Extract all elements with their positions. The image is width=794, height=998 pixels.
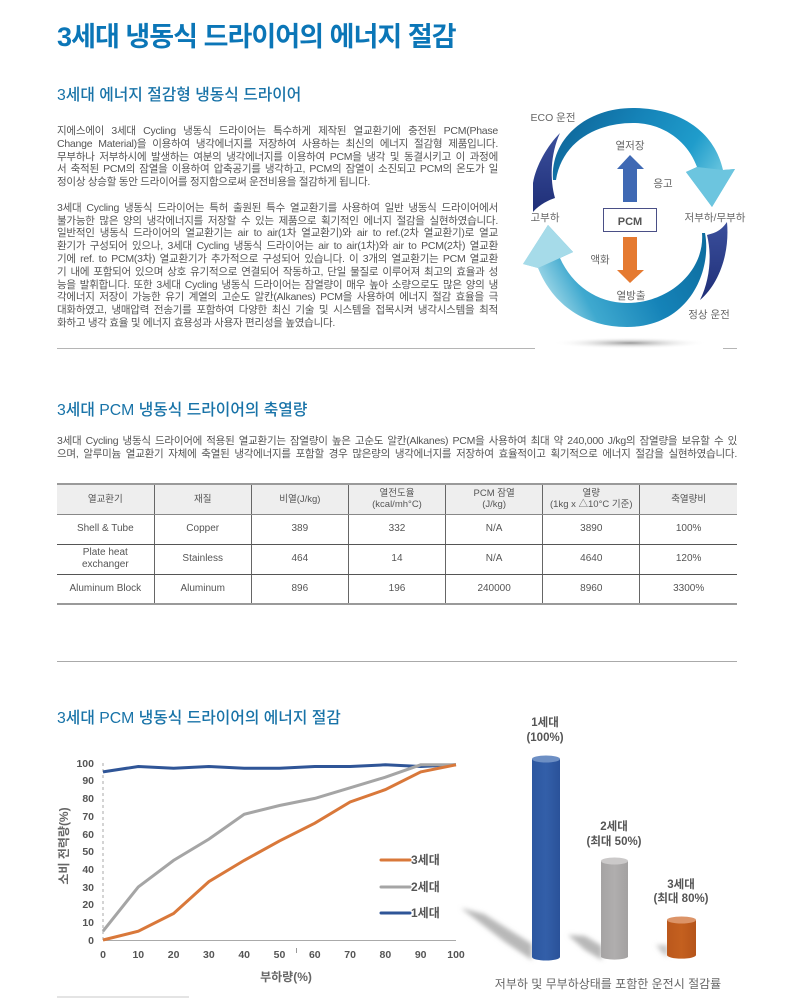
heading: PCM dryer heat storage: 3세대 PCM 냉동식 드라이어의 축열량 <box>57 402 307 419</box>
y axis ticks and labels: 60 <box>82 829 94 841</box>
table: heat exchanger comparison: 8960 <box>580 583 602 594</box>
table: heat exchanger comparison: (kcal/mh°C) <box>372 499 422 510</box>
legend: 3세대 <box>411 853 440 867</box>
text block: dryer description: 정이상 상승할 동안 드라이어를 정지함으로써 운전비용을 절감하게 됩니다. <box>57 176 370 188</box>
text block: dryer description: 서 축적된 PCM의 잠열을 이용하여 압축공기를 냉각하고, PCM의 잠열이 소진되고 PCM의 온도가 일 <box>57 163 498 175</box>
table: heat exchanger comparison: Stainless <box>182 553 223 564</box>
cylinder chart: generation comparison <box>461 715 721 991</box>
text block: dryer description <box>57 125 498 329</box>
table: heat exchanger comparison: PCM 잠열 <box>474 488 515 499</box>
x axis labels: 80 <box>380 949 391 961</box>
text block: dryer description: 불가능한 많은 양의 냉각에너지를 저장할 수 있는 제품으로 획기적인 에너지 절감을 실현하였습니다. <box>57 215 498 227</box>
table: heat exchanger comparison: 축열량비 <box>671 494 706 504</box>
title: 3세대 냉동식 드라이어의 에너지 절감 <box>57 22 456 52</box>
table: heat exchanger comparison: 100% <box>676 523 701 534</box>
text block: dryer description: 대화하였고, 냉매압력 전송기를 포함하여 다양한 최신 기술 및 시스템을 접목시켜 냉각시스템을 최적 <box>57 304 498 316</box>
text block: dryer description: 기에 ref. to PCM(3차) 열교환기가 추가적으로 구성되어 있습니다. 이 3개의 열교환기는 PCM 열교환 <box>57 253 498 265</box>
heading: energy-saving dryer: 3세대 에너지 절감형 냉동식 드라이어 <box>57 87 301 104</box>
cylinder: 2nd generation <box>601 858 628 960</box>
table: heat exchanger comparison: 3300% <box>673 583 704 594</box>
box: PCM: PCM <box>618 216 642 228</box>
text block: PCM description: 3세대 Cycling 냉동식 드라이어에 적용된 열교환기는 잠열량이 높은 고순도 알칸(Alkanes) PCM을 사용하여 최대 약 240,000 J/kg의 잠열량을 보유할 수 있 <box>57 435 737 447</box>
table: heat exchanger comparison: 3890 <box>580 523 602 534</box>
cylinder shadows <box>461 908 668 960</box>
table: heat exchanger comparison: 332 <box>389 523 405 534</box>
text block: PCM description <box>57 435 737 460</box>
text block: dryer description: 각에너지 저장이 가능한 유기 계열의 고순도 알칸(Alkanes) PCM을 사용하여 에너지 절감 효율을 극 <box>57 291 498 303</box>
text block: dryer description: 3세대 Cycling 냉동식 드라이어는 특허 출원된 특수 열교환기를 사용하여 일반 냉동식 드라이어에서 <box>57 202 498 214</box>
icon: navy right tail <box>700 222 727 300</box>
text block: dryer description: 화하고 냉각 효율 및 에너지 효용성과 사용자 편리성을 높였습니다. <box>57 317 335 329</box>
x axis labels: 20 <box>168 949 180 961</box>
diagram labels: ECO 운전 <box>530 112 576 124</box>
box: PCM <box>604 208 656 232</box>
diagram labels <box>530 112 746 321</box>
legend: 1세대 <box>411 906 440 920</box>
cylinder labels: (최대 80%) <box>653 891 709 905</box>
table: heat exchanger comparison: Shell & Tube <box>77 523 134 534</box>
diagram labels: 응고 <box>653 178 673 190</box>
cylinder labels: 1세대 <box>531 715 559 729</box>
text block: PCM description: 으며, 알루미늄 열교환기 자체에 축열된 냉각에너지를 포함할 경우 많은량의 냉각에너지를 저장하여 효율적이고 획기적으로 에너지 절감을 실현하였습니다. <box>57 448 737 460</box>
table: heat exchanger comparison: Aluminum Block <box>69 583 141 594</box>
x axis labels: 30 <box>203 949 215 961</box>
diagram labels: 열저장 <box>616 140 645 152</box>
floor shadow <box>552 337 708 349</box>
y axis ticks and labels: 0 <box>88 935 94 947</box>
y axis ticks and labels: 10 <box>82 917 94 929</box>
y axis ticks and labels: 20 <box>82 899 94 911</box>
diagram labels: 액화 <box>590 254 610 266</box>
arrow: lower ring <box>523 225 706 327</box>
table: heat exchanger comparison: Aluminum <box>180 583 225 594</box>
arrow: heat release down <box>617 237 644 283</box>
cylinder: 1st generation <box>532 756 560 961</box>
text block: dryer description: 일반적인 냉동식 드라이어의 열교환기는 air to air(1차 열교환기)와 air to ref.(2차 열교환기)로 열교 <box>57 227 498 239</box>
table: heat exchanger comparison: 464 <box>292 553 308 564</box>
cylinder labels: (최대 50%) <box>586 834 642 848</box>
table: heat exchanger comparison: Plate heat <box>83 547 128 558</box>
y axis ticks and labels <box>76 758 94 947</box>
table: heat exchanger comparison: 열량 <box>583 488 600 499</box>
lower ring arrow head <box>523 225 573 268</box>
table: heat exchanger comparison: 열교환기 <box>88 494 123 504</box>
x axis labels: 70 <box>344 949 356 961</box>
line chart: power consumption by load <box>57 758 465 984</box>
icon: navy left tail <box>533 133 560 212</box>
divider: section 2 <box>57 661 737 662</box>
table: heat exchanger comparison: 4640 <box>580 553 602 564</box>
caption: 저부하 및 무부하상태를 포함한 운전시 절감률 <box>495 977 721 991</box>
x axis labels: 50 <box>274 949 285 961</box>
x axis labels: 40 <box>238 949 250 961</box>
table: heat exchanger comparison: 120% <box>676 553 701 564</box>
x axis labels: 90 <box>415 949 427 961</box>
text block: dryer description: 기 내에 포함되어 있으며 상호 유기적으로 연결되어 작동하고, 단일 물질로 이루어져 최고의 효율과 성 <box>57 266 498 278</box>
cylinder: 3rd generation <box>667 916 696 959</box>
x axis labels: 0 <box>100 949 106 961</box>
arrow: upper ring <box>553 108 735 207</box>
table: heat exchanger comparison: (1kg x △10°C 기준) <box>550 499 633 510</box>
diagram labels: 정상 운전 <box>688 309 730 321</box>
y axis ticks and labels: 30 <box>82 882 94 894</box>
series: 3rd generation <box>103 765 456 940</box>
table: heat exchanger comparison: 14 <box>391 553 403 564</box>
legend <box>381 853 440 920</box>
diagram labels: 저부하/무부하 <box>685 211 746 224</box>
legend: 2세대 <box>411 880 440 894</box>
series: 1st generation <box>103 765 456 772</box>
table: heat exchanger comparison: (J/kg) <box>482 499 506 510</box>
table: heat exchanger comparison: N/A <box>486 553 502 564</box>
divider: section 1 left <box>57 348 535 349</box>
series: 2nd generation <box>103 765 456 931</box>
text block: dryer description: 환기가 구성되어 있으나, 3세대 Cycling 냉동식 드라이어는 air to air(1차)와 air to PCM(2차) 열교환 <box>57 240 498 252</box>
y axis title: 소비 전력량(%) <box>57 807 71 885</box>
x axis labels <box>100 949 465 961</box>
x axis title: 부하량(%) <box>260 970 312 984</box>
cylinder labels: 2세대 <box>600 819 628 833</box>
diagram labels: 고부하 <box>531 211 560 224</box>
y axis ticks and labels: 100 <box>76 758 94 770</box>
cylinder labels: (100%) <box>526 732 564 744</box>
y axis <box>102 763 104 940</box>
text block: dryer description: 지에스에이 3세대 Cycling 냉동식 드라이어는 특수하게 제작된 열교환기에 충전된 PCM(Phase <box>57 125 498 137</box>
x axis <box>103 940 456 942</box>
y axis ticks and labels: 40 <box>82 864 94 876</box>
table: heat exchanger comparison: 896 <box>292 583 308 594</box>
y axis ticks and labels: 90 <box>82 775 94 787</box>
y axis ticks and labels: 80 <box>82 793 94 805</box>
arrow: heat storage up <box>617 155 644 202</box>
y axis ticks and labels: 70 <box>82 811 94 823</box>
x axis labels: 100 <box>447 949 465 961</box>
table: heat exchanger comparison: 재질 <box>194 494 211 504</box>
table: heat exchanger comparison: 비열(J/kg) <box>279 494 320 504</box>
table: heat exchanger comparison: N/A <box>486 523 502 534</box>
text block: dryer description: 능을 발휘합니다. 또한 3세대 Cycling 냉동식 드라이어는 잠열량이 매우 높아 소량으로도 많은 양의 냉 <box>57 279 498 291</box>
x axis labels: 10 <box>132 949 144 961</box>
text block: dryer description: Change Material)을 이용하여 냉각에너지를 저장하여 사용하는 최신의 에너지 절감형 제품입니다. <box>57 138 498 150</box>
table: heat exchanger comparison: 389 <box>292 523 308 534</box>
diagram labels: 열방출 <box>617 290 646 302</box>
x axis labels: 60 <box>309 949 321 961</box>
table: heat exchanger comparison: exchanger <box>82 559 129 570</box>
table: heat exchanger comparison <box>57 483 737 605</box>
table: heat exchanger comparison: Copper <box>186 523 219 534</box>
text block: dryer description: 무부하나 저부하시에 발생하는 여분의 냉각에너지를 이용하여 PCM을 냉각 및 동결시키고 이 과정에 <box>57 151 498 163</box>
y axis ticks and labels: 50 <box>82 846 94 858</box>
heading: energy savings: 3세대 PCM 냉동식 드라이어의 에너지 절감 <box>57 710 341 727</box>
upper ring arrow head <box>686 167 735 207</box>
diagram: PCM cycle <box>523 108 746 349</box>
cylinder labels <box>526 715 709 905</box>
table: heat exchanger comparison: 196 <box>389 583 405 594</box>
cylinder labels: 3세대 <box>667 877 695 891</box>
table: heat exchanger comparison: 열전도율 <box>380 488 414 499</box>
table: heat exchanger comparison: 240000 <box>477 583 511 594</box>
